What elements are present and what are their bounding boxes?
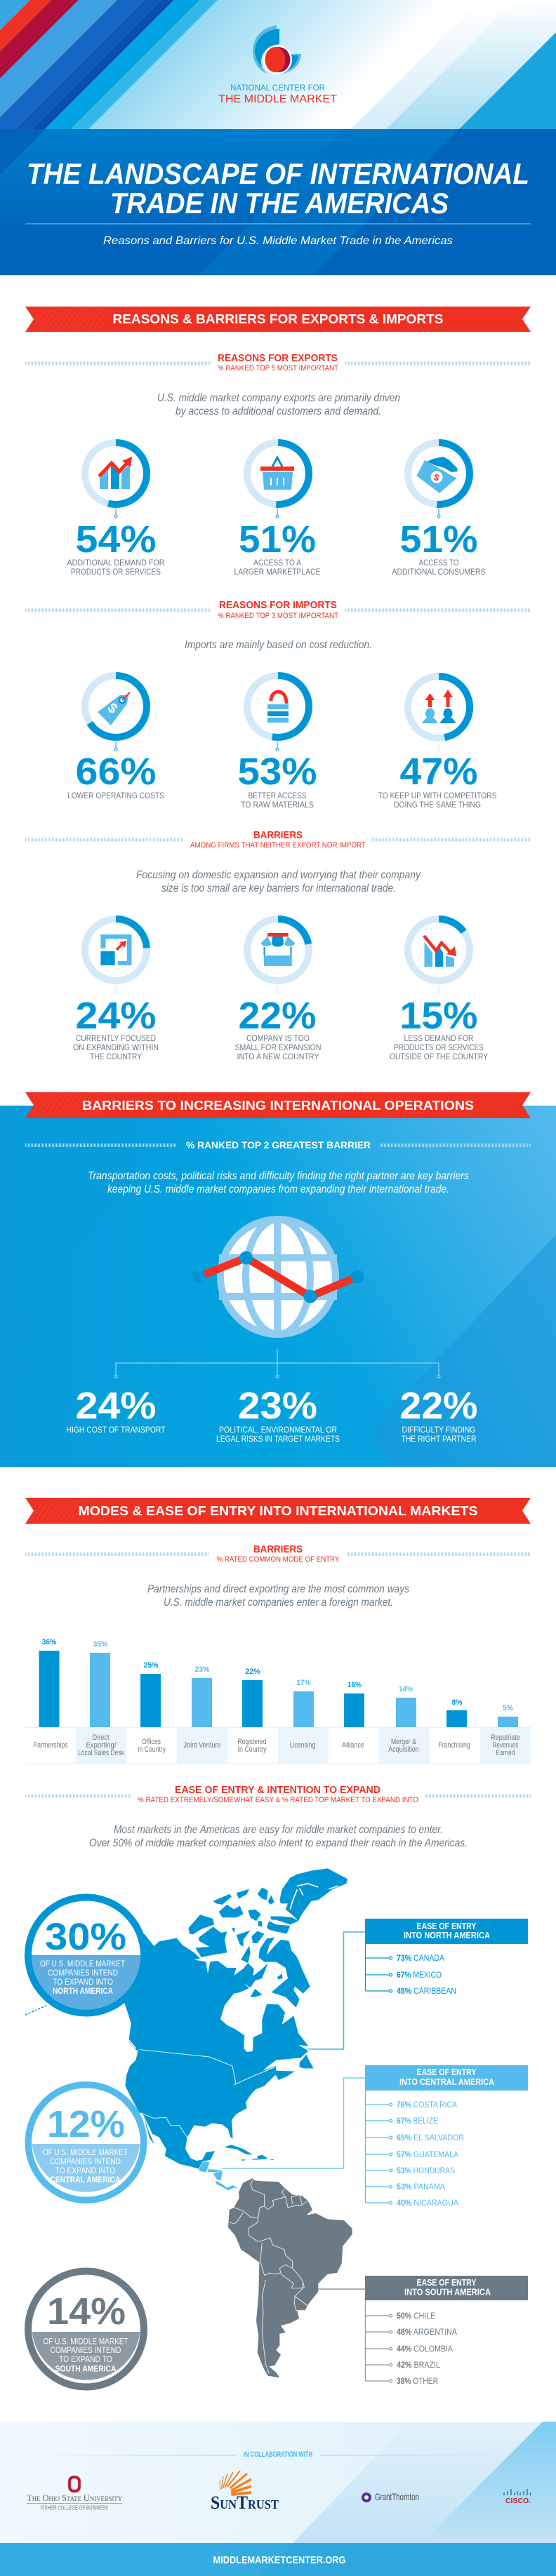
- banner: reasons and barriers: REASONS & BARRIERS FOR EXPORTS & IMPORTS: [112, 312, 444, 326]
- bars: [39, 1651, 518, 1727]
- panel: ease of entry south america: 44% COLOMBIA: [397, 2344, 453, 2354]
- bar values: 8%: [452, 1698, 463, 1707]
- callout: 14% south america: [25, 2267, 147, 2391]
- panel: ease of entry south america: 38% OTHER: [397, 2376, 438, 2386]
- intro: operations: Transportation costs, political risks and difficulty finding the right partner are key barriers: [88, 1170, 469, 1182]
- stat: 54% additional demand: ADDITIONAL DEMAND FOR: [67, 558, 165, 568]
- banner: reasons and barriers: [25, 307, 531, 332]
- panel: ease of entry south america: 42% BRAZIL: [397, 2360, 440, 2370]
- heading: barriers: AMONG FIRMS THAT NEITHER EXPORT NOR IMPORT: [190, 841, 366, 850]
- heading: ease of entry: % RATED EXTREMELY/SOMEWHAT EASY & % RATED TOP MARKET TO EXPAND INTO: [138, 1796, 418, 1804]
- bar labels: Direct: [93, 1733, 110, 1742]
- logo: suntrust: SunTrust: [211, 2493, 279, 2513]
- stat: 24% expanding within country: 24%: [76, 995, 156, 1037]
- callout: 12% central america: COMPANIES INTEND: [50, 2156, 121, 2166]
- bar labels: [33, 1733, 520, 1757]
- stat: 24% expanding within country: THE COUNTRY: [90, 1052, 142, 1061]
- panel: ease of entry south america: EASE OF ENTRY: [417, 2278, 477, 2288]
- stat: 54% additional demand: [67, 443, 165, 577]
- panel: ease of entry north america: EASE OF ENTRY: [417, 1921, 477, 1931]
- bar values: 16%: [348, 1681, 362, 1689]
- callout: 12% central america: OF U.S. MIDDLE MARKET: [43, 2147, 128, 2157]
- intro: exports: [157, 392, 400, 417]
- icon: price tag: [98, 692, 130, 725]
- intro: imports: Imports are mainly based on cost reduction.: [185, 639, 372, 651]
- logo: ohio state: [27, 2477, 122, 2511]
- stat: 22% right partner: 22%: [400, 1385, 477, 1427]
- icon: globe with trend line: [192, 1216, 364, 1338]
- callout: 14% south america: 14%: [47, 2290, 126, 2333]
- bar values: 14%: [399, 1685, 413, 1693]
- logo: cisco: CISCO.: [505, 2497, 531, 2505]
- stat: 24% transport: 24%: [76, 1385, 156, 1427]
- stat: 66% lower operating costs: LOWER OPERATING COSTS: [67, 791, 164, 800]
- icon: price tag: $: [105, 700, 120, 717]
- bar labels: Earned: [496, 1749, 515, 1757]
- stat: 22% too small: COMPANY IS TOO: [246, 1033, 310, 1043]
- panel: ease of entry north america: INTO NORTH AMERICA: [404, 1931, 490, 1940]
- bar labels: In Country: [138, 1745, 166, 1754]
- stat: 23% political risks: POLITICAL, ENVIRONMENTAL OR: [219, 1425, 337, 1435]
- logo: ohio state: FISHER COLLEGE OF BUSINESS: [41, 2504, 108, 2511]
- map: north america: [112, 1868, 348, 2190]
- heading: barriers mode of entry: % RATED COMMON MODE OF ENTRY: [216, 1555, 340, 1564]
- stat: 22% too small: SMALL FOR EXPANSION: [234, 1042, 322, 1052]
- callout: 12% central america: 12%: [47, 2103, 125, 2145]
- panel: ease of entry south america: 48% ARGENTINA: [397, 2327, 457, 2337]
- south america borders: [230, 2178, 307, 2373]
- logo: suntrust: [211, 2471, 279, 2513]
- intro: ease of entry: Most markets in the Americas are easy for middle market companies to enter.: [114, 1824, 443, 1836]
- callout: 14% south america: SOUTH AMERICA: [55, 2364, 117, 2374]
- stat: 53% raw materials: TO RAW MATERIALS: [241, 800, 314, 810]
- panel: ease of entry central america: 40% NICARAGUA: [397, 2198, 458, 2208]
- bar labels: Franchising: [438, 1741, 470, 1750]
- intro: modes: U.S. middle market companies enter a foreign market.: [164, 1597, 393, 1609]
- heading: barriers: BARRIERS: [253, 830, 303, 841]
- icon: money and hand: [416, 457, 458, 493]
- bar values: 36%: [42, 1638, 57, 1646]
- heading: reasons for exports: REASONS FOR EXPORTS: [218, 353, 338, 364]
- stat: 15% less demand: 15%: [400, 995, 477, 1037]
- tree connector: [114, 1349, 440, 1378]
- stat: 15% less demand: PRODUCTS OR SERVICES: [394, 1042, 484, 1052]
- bar labels: In Country: [237, 1745, 267, 1754]
- bar labels: Registered: [237, 1738, 267, 1746]
- bar labels: Acquisition: [388, 1745, 419, 1754]
- logo text: NATIONAL CENTER FOR: [230, 83, 325, 93]
- stat: 24% expanding within country: ON EXPANDING WITHIN: [73, 1042, 159, 1052]
- panel: ease of entry central america: 76% COSTA RICA: [397, 2100, 457, 2109]
- intro: exports: U.S. middle market company exports are primarily driven: [157, 392, 400, 404]
- panel: ease of entry central america: 65% EL SALVADOR: [397, 2133, 464, 2142]
- heading: ease of entry: EASE OF ENTRY & INTENTION TO EXPAND: [175, 1785, 380, 1796]
- stat: 66% lower operating costs: 66%: [76, 751, 156, 793]
- arctic islands: [188, 1868, 348, 2008]
- stat: 24% transport: HIGH COST OF TRANSPORT: [66, 1425, 166, 1435]
- heading: ease of entry: [25, 1785, 531, 1804]
- stat: 54% additional demand: PRODUCTS OR SERVICES: [71, 567, 161, 577]
- stat: 15% less demand: [390, 919, 488, 1061]
- stat: 15% less demand: OUTSIDE OF THE COUNTRY: [390, 1052, 488, 1061]
- panel: ease of entry central america: 53% PANAMA: [397, 2182, 445, 2192]
- heading: reasons for exports: % RANKED TOP 5 MOST IMPORTANT: [218, 364, 338, 373]
- stat: 47% keep up with competitors: 47%: [400, 751, 477, 793]
- intro: barriers: [136, 869, 421, 894]
- icon: money and hand: $: [432, 471, 442, 483]
- callout: 30% north america: TO EXPAND INTO: [53, 1977, 113, 1987]
- bar values: [42, 1638, 513, 1712]
- stat: 22% too small: 22%: [239, 995, 316, 1037]
- island channels: [121, 1884, 338, 2048]
- stat: 51% larger marketplace: ACCESS TO A: [253, 558, 301, 568]
- panel: ease of entry central america: 57% GUATEMALA: [397, 2149, 458, 2159]
- title: [27, 157, 529, 220]
- callout: 14% south america: COMPANIES INTEND: [51, 2345, 121, 2355]
- icon: open lock: [267, 692, 289, 723]
- header diagonal stripes: [0, 0, 556, 129]
- heading: barriers: [25, 830, 531, 850]
- logo: cisco: [504, 2489, 531, 2505]
- callout: 12% central america: TO EXPAND INTO: [55, 2166, 115, 2175]
- logo mark: [253, 25, 301, 74]
- stat: 53% raw materials: [237, 676, 317, 810]
- intro: operations: keeping U.S. middle market companies from expanding their international trade.: [107, 1183, 449, 1195]
- bar labels: Repatriate: [491, 1733, 520, 1742]
- collaboration label: IN COLLABORATION WITH: [244, 2450, 312, 2459]
- panel: ease of entry north america: 73% CANADA: [397, 1953, 444, 1963]
- bar values: 5%: [503, 1704, 513, 1712]
- bar chart: modes of entry: [25, 1638, 531, 1764]
- panel: ease of entry central america: 67% BELIZE: [397, 2116, 438, 2126]
- panel: ease of entry central america: EASE OF ENTRY: [417, 2067, 477, 2077]
- subtitle: Reasons and Barriers for U.S. Middle Market Trade in the Americas: [103, 235, 453, 247]
- panel: ease of entry central america: INTO CENTRAL AMERICA: [399, 2077, 494, 2087]
- stat: 47% keep up with competitors: TO KEEP UP WITH COMPETITORS: [378, 791, 497, 800]
- bar labels: Joint Venture: [184, 1741, 220, 1750]
- bar values: 22%: [246, 1668, 260, 1676]
- stat: 53% raw materials: 53%: [237, 751, 317, 793]
- bar labels: Local Sales Desk: [78, 1749, 124, 1757]
- intro: ease of entry: Over 50% of middle market companies also intent to expand their reach in the Americas.: [89, 1837, 468, 1849]
- heading: barriers mode of entry: BARRIERS: [253, 1544, 303, 1555]
- panel: ease of entry central america: 53% HONDURAS: [397, 2166, 455, 2175]
- panel: ease of entry south america: [365, 2276, 528, 2386]
- stat: 53% raw materials: BETTER ACCESS: [249, 791, 306, 800]
- stat: 51% larger marketplace: LARGER MARKETPLACE: [234, 567, 320, 577]
- icon: expansion: [100, 934, 131, 965]
- stat: 54% additional demand: 54%: [76, 518, 156, 561]
- stat: 15% less demand: LESS DEMAND FOR: [404, 1033, 474, 1043]
- stat: 24% expanding within country: CURRENTLY FOCUSED: [76, 1033, 156, 1043]
- banner: barriers to operations: [25, 1092, 531, 1118]
- bar labels: Exporting/: [86, 1741, 117, 1750]
- callout: 30% north america: OF U.S. MIDDLE MARKET: [40, 1959, 126, 1968]
- heading: reasons for imports: [25, 600, 531, 620]
- callout: 30% north america: COMPANIES INTEND: [48, 1968, 118, 1978]
- stat: 23% political risks: 23%: [238, 1385, 317, 1427]
- intro: barriers: size is too small are key barriers for international trade.: [161, 883, 396, 894]
- icon: small shop: [261, 933, 295, 966]
- bar labels: Partnerships: [33, 1741, 68, 1750]
- heading: ranked top 2: % RANKED TOP 2 GREATEST BARRIER: [186, 1139, 371, 1151]
- panel: ease of entry north america: 67% MEXICO: [397, 1970, 442, 1980]
- stat: 51% additional consumers: [392, 443, 486, 577]
- stat: 23% political risks: LEGAL RISKS IN TARGET MARKETS: [216, 1434, 340, 1444]
- stat: 51% additional consumers: ADDITIONAL CONSUMERS: [392, 567, 486, 577]
- bar labels: Alliance: [342, 1741, 364, 1750]
- stat: 22% too small: INTO A NEW COUNTRY: [237, 1052, 319, 1061]
- logo: grant thornton: [362, 2491, 419, 2502]
- intro: barriers: Focusing on domestic expansion and worrying that their company: [136, 869, 421, 881]
- footer: [0, 2422, 556, 2576]
- intro: modes: Partnerships and direct exporting are the most common ways: [147, 1583, 409, 1595]
- stat: 22% too small: [234, 919, 322, 1061]
- callout: 14% south america: TO EXPAND TO: [59, 2354, 112, 2364]
- panel: ease of entry south america: INTO SOUTH AMERICA: [404, 2287, 491, 2297]
- icon: basket: [260, 457, 294, 490]
- bar labels: Offices: [142, 1738, 161, 1746]
- footer bar: [0, 2543, 556, 2576]
- header: [0, 0, 556, 276]
- icon: people and arrows: [422, 690, 456, 723]
- map: south america: [228, 2178, 352, 2377]
- logo: grant thornton: GrantThornton: [375, 2491, 419, 2502]
- heading: reasons for exports: [25, 353, 531, 373]
- callout: 14% south america: OF U.S. MIDDLE MARKET: [44, 2336, 128, 2346]
- connector lines to panels: [222, 1932, 365, 2289]
- bar values: 35%: [93, 1640, 108, 1649]
- panel: ease of entry north america: 48% CARIBBEAN: [397, 1986, 456, 1996]
- stat: 66% lower operating costs: [67, 676, 164, 800]
- stat: 47% keep up with competitors: DOING THE SAME THING: [394, 800, 481, 810]
- stat: 51% larger marketplace: 51%: [239, 518, 316, 561]
- panel: barriers to international operations: [0, 1092, 556, 1467]
- callout: 30% north america: 30%: [45, 1916, 126, 1958]
- intro: ease of entry: [89, 1824, 468, 1849]
- logo text: [218, 83, 338, 105]
- callout: 30% north america: [25, 1894, 147, 2016]
- banner: barriers to operations: BARRIERS TO INCREASING INTERNATIONAL OPERATIONS: [82, 1099, 474, 1113]
- bar labels: Merger &: [391, 1738, 417, 1746]
- stat: 51% additional consumers: ACCESS TO: [418, 558, 459, 568]
- banner: modes and ease of entry: [25, 1498, 531, 1524]
- intro: exports: by access to additional customers and demand.: [176, 405, 381, 417]
- callout: 12% central america: CENTRAL AMERICA: [51, 2175, 121, 2185]
- logo: [218, 25, 338, 105]
- heading: barriers mode of entry: [25, 1544, 531, 1564]
- bar values: 17%: [296, 1679, 311, 1687]
- heading: reasons for imports: % RANKED TOP 3 MOST IMPORTANT: [218, 612, 338, 620]
- panel: ease of entry central america: [365, 2065, 528, 2208]
- stat: 47% keep up with competitors: [378, 676, 497, 810]
- stat: 24% expanding within country: [73, 919, 159, 1061]
- stat: 22% right partner: THE RIGHT PARTNER: [402, 1434, 477, 1444]
- stat: 22% right partner: DIFFICULTY FINDING: [402, 1425, 476, 1435]
- icon: rising chart: [99, 457, 132, 489]
- logo: ohio state: The Ohio State University: [27, 2493, 122, 2503]
- aleutian islands: [25, 2005, 48, 2015]
- stat: 22% right partner: [400, 1385, 477, 1444]
- banner: modes and ease of entry: MODES & EASE OF ENTRY INTO INTERNATIONAL MARKETS: [79, 1504, 477, 1518]
- stat: 51% larger marketplace: [234, 443, 320, 577]
- stat: 51% additional consumers: 51%: [400, 518, 477, 561]
- caribbean: [225, 2145, 253, 2155]
- mainland: [112, 1929, 308, 2169]
- panel: ease of entry north america: [365, 1919, 528, 1996]
- heading: reasons for imports: REASONS FOR IMPORTS: [219, 600, 337, 611]
- callout: 30% north america: NORTH AMERICA: [53, 1986, 113, 1996]
- stat: 23% political risks: [216, 1385, 340, 1444]
- callout: 12% central america: [25, 2081, 147, 2203]
- stat: 24% transport: [66, 1385, 166, 1435]
- footer bar: MIDDLEMARKETCENTER.ORG: [213, 2554, 345, 2566]
- logo text: THE MIDDLE MARKET: [218, 93, 338, 105]
- panel: ease of entry south america: 50% CHILE: [397, 2311, 435, 2321]
- bar values: 23%: [195, 1665, 210, 1674]
- intro: modes: [147, 1583, 409, 1609]
- bar labels: Licensing: [290, 1741, 315, 1750]
- title: TRADE IN THE AMERICAS: [110, 187, 449, 220]
- intro: operations: [88, 1170, 469, 1195]
- icon: falling chart: [424, 936, 456, 967]
- bar labels: Revenues: [493, 1741, 519, 1750]
- central america: [199, 2161, 223, 2180]
- bar values: 25%: [143, 1661, 159, 1670]
- title band: [0, 129, 556, 276]
